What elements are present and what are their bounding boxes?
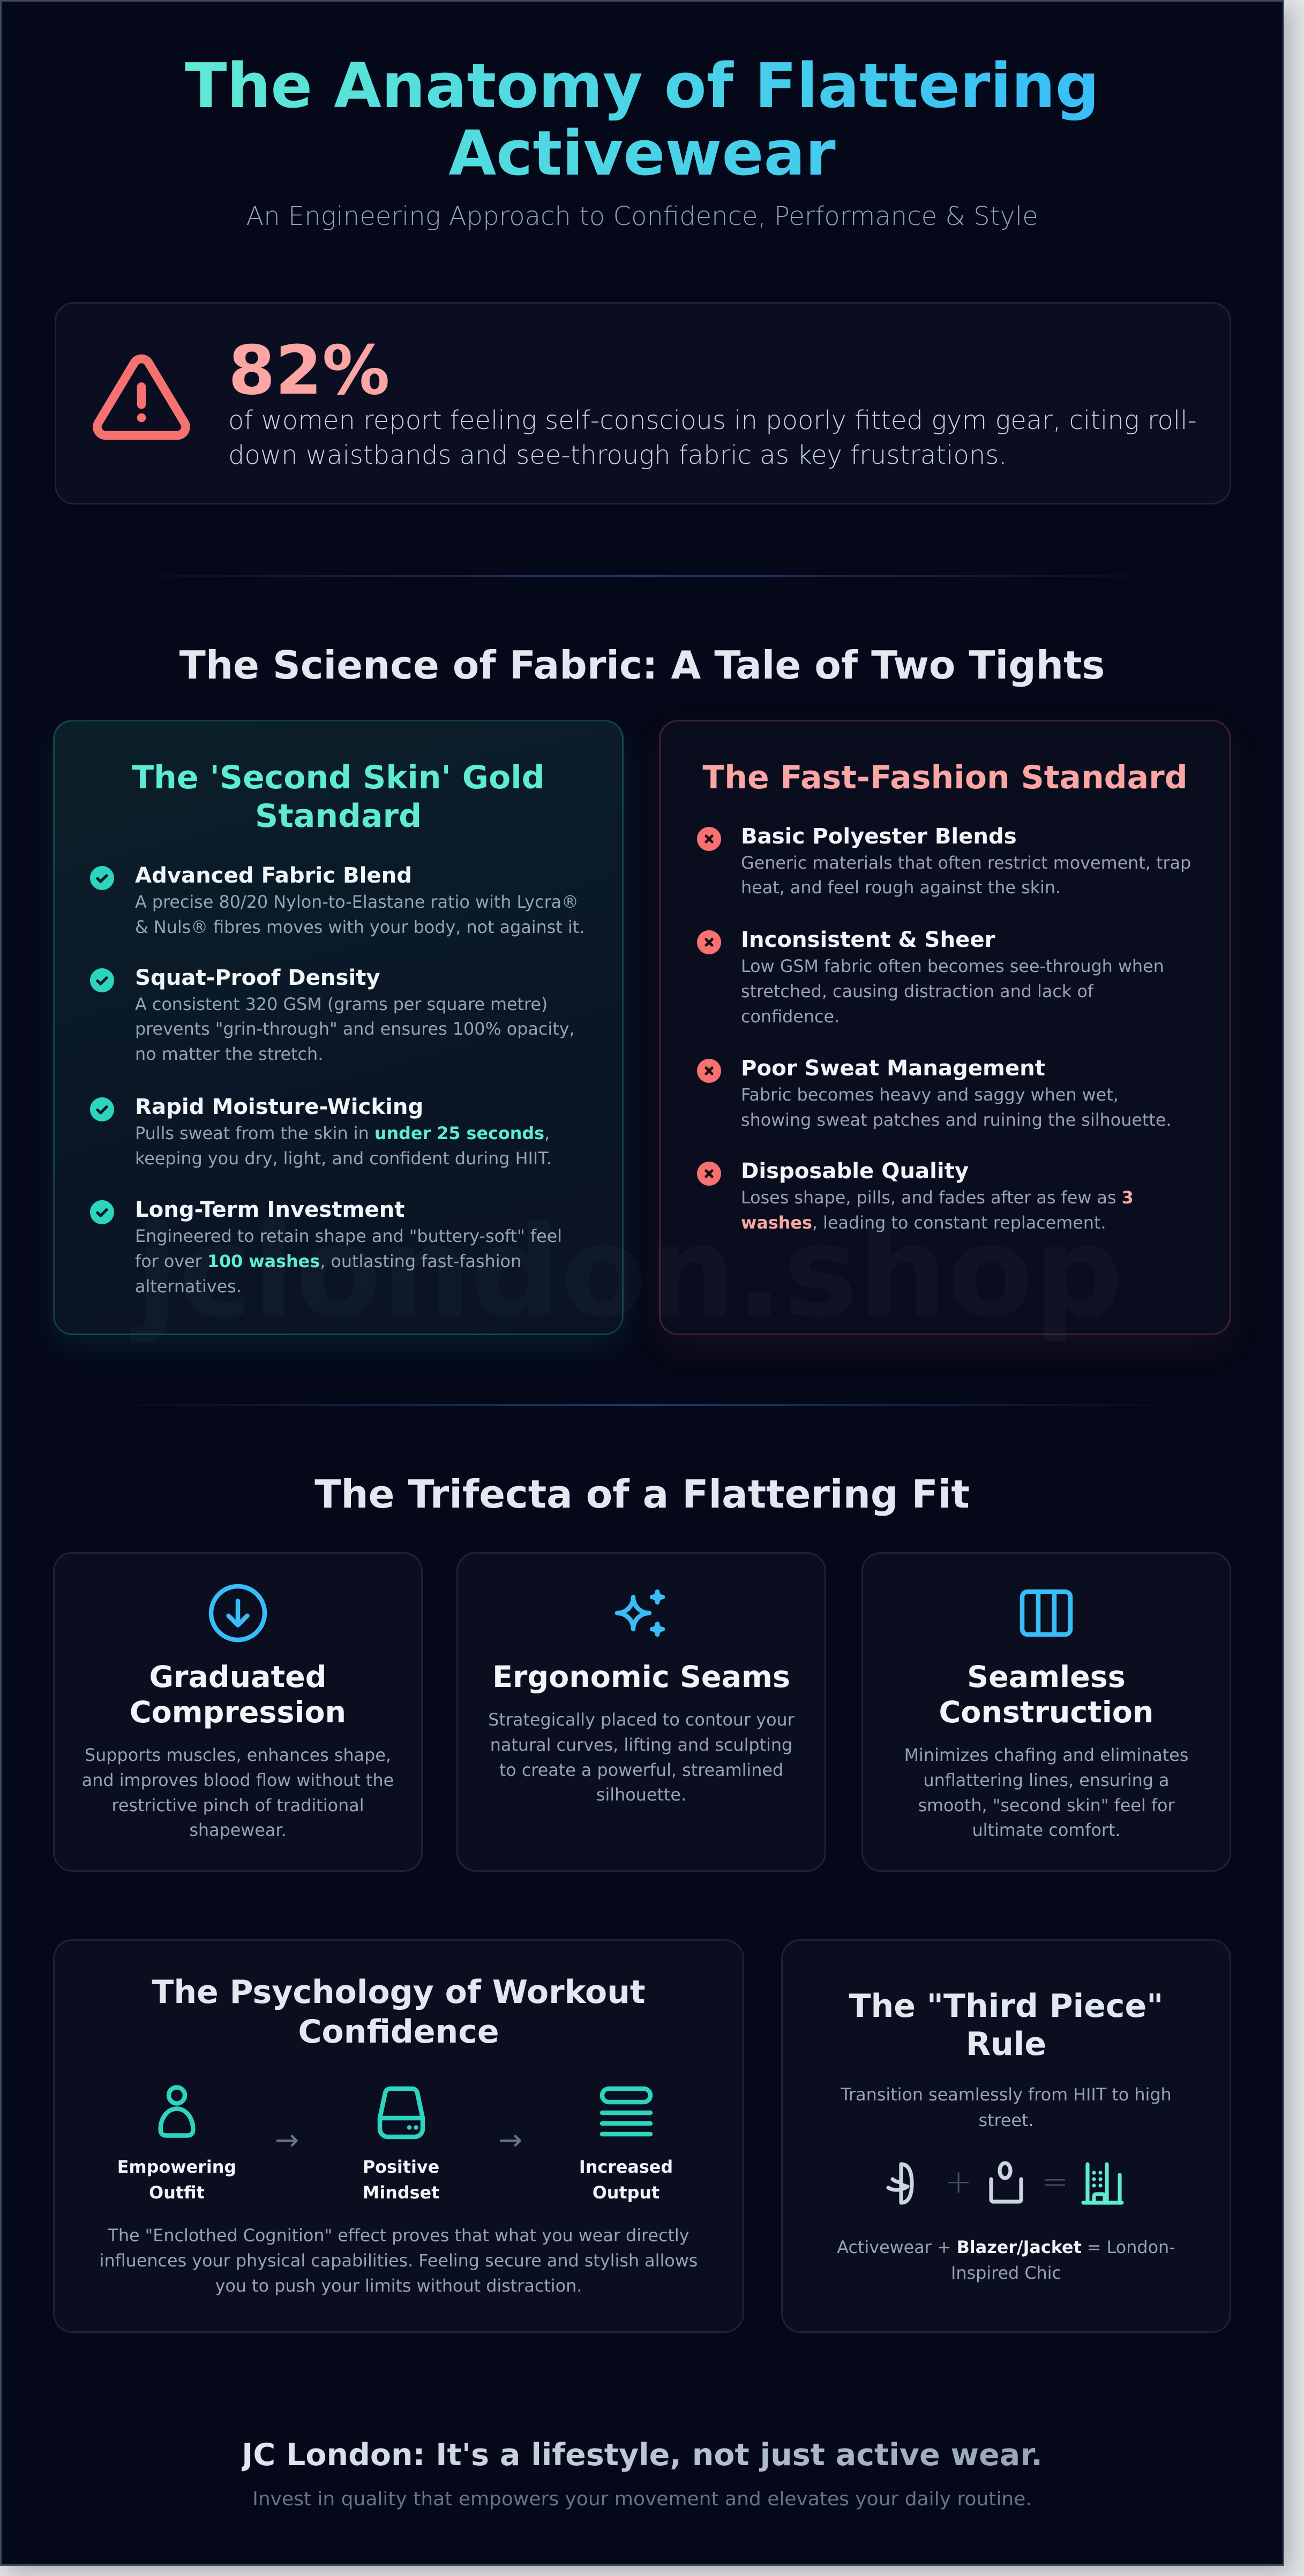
item: long-term investment: for over 100 washes, outlasting fast-fashion — [135, 1252, 521, 1271]
panel title: The "Third Piece" — [849, 1987, 1163, 2025]
watermark: jclondon.shop — [135, 1200, 1123, 1345]
card text — [904, 1745, 1188, 1840]
item: rapid moisture-wicking: Rapid Moisture-Wicking — [135, 1095, 423, 1119]
item: squat-proof density: A consistent 320 GSM (grams per square metre) — [135, 994, 548, 1014]
stat text: down waistbands and see-through fabric as key frustrations. — [228, 440, 1007, 470]
panel title: Rule — [966, 2025, 1046, 2063]
item: inconsistent & sheer: confidence. — [741, 1007, 840, 1027]
panel title: Confidence — [298, 2013, 499, 2050]
panel title: The 'Second Skin' Gold — [132, 759, 545, 796]
item: basic polyester: Generic materials that often restrict movement, trap — [741, 853, 1191, 873]
footer tagline: JC London: It's a lifestyle, not just active wear. — [242, 2437, 1043, 2473]
item: inconsistent & sheer: Inconsistent & Sheer — [741, 928, 995, 952]
card text: unflattering lines, ensuring a — [923, 1771, 1170, 1790]
description: you to push your limits without distraction. — [215, 2276, 582, 2296]
item: basic polyester — [741, 824, 1191, 898]
item: squat-proof density: no matter the stretch. — [135, 1044, 323, 1064]
caption — [783, 2235, 1230, 2286]
card text: silhouette. — [596, 1785, 686, 1805]
icon: x — [697, 827, 721, 851]
icon: x — [697, 930, 721, 954]
icon: x — [697, 1162, 721, 1186]
card title: Seamless — [967, 1660, 1126, 1694]
item: disposable quality: Disposable Quality — [741, 1159, 969, 1184]
label: positive mindset: Mindset — [363, 2183, 439, 2203]
title — [185, 50, 1099, 190]
icon: check — [90, 968, 114, 992]
card title: Construction — [939, 1695, 1153, 1730]
panel: third piece rule — [781, 1939, 1231, 2333]
card title: Compression — [130, 1695, 346, 1730]
icon: mindset — [369, 2081, 433, 2145]
card: graduated compression — [53, 1552, 423, 1872]
stat number: 82% — [228, 331, 390, 409]
subtitle: Transition seamlessly from HIIT to high — [841, 2085, 1172, 2105]
card title: Ergonomic Seams — [492, 1660, 790, 1694]
panel: fast fashion — [659, 720, 1231, 1335]
icon: blazer — [980, 2158, 1032, 2209]
item: basic polyester: heat, and feel rough against the skin. — [741, 878, 1061, 898]
card title — [130, 1660, 346, 1730]
item: disposable quality — [741, 1159, 1134, 1233]
card title: Graduated — [149, 1660, 326, 1694]
icon: sparkles — [615, 1590, 665, 1637]
heading: trifecta: The Trifecta of a Flattering Fit — [314, 1472, 970, 1517]
description: The "Enclothed Cognition" effect proves that what you wear directly — [108, 2226, 690, 2246]
panel: second skin gold standard — [53, 720, 624, 1335]
panel title: Standard — [255, 797, 422, 835]
stat text: of women report feeling self-conscious in poorly fitted gym gear, citing roll- — [228, 405, 1197, 435]
equals: = — [1041, 2163, 1068, 2201]
label: increased output: Output — [593, 2183, 660, 2203]
icon: check — [90, 1200, 114, 1224]
card text: shapewear. — [189, 1820, 287, 1840]
card text: and improves blood flow without the — [82, 1771, 394, 1790]
icon: x — [697, 1059, 721, 1083]
item: advanced fabric blend: & Nuls® fibres moves with your body, not against it. — [135, 917, 584, 937]
icon: check — [90, 1097, 114, 1121]
label: empowering outfit: Outfit — [149, 2183, 205, 2203]
label: empowering outfit — [104, 2155, 249, 2206]
item: disposable quality: Loses shape, pills, and fades after as few as 3 — [741, 1188, 1134, 1208]
plus: + — [945, 2163, 972, 2201]
icon: stack — [594, 2081, 658, 2145]
card text: to create a powerful, streamlined — [499, 1760, 783, 1780]
icon: activewear — [878, 2158, 929, 2209]
subtitle: An Engineering Approach to Confidence, Performance & Style — [246, 201, 1038, 231]
card: seamless construction — [861, 1552, 1231, 1872]
panel title: The Psychology of Workout — [152, 1974, 646, 2011]
card text: Supports muscles, enhances shape, — [85, 1745, 391, 1765]
panel title: The Fast-Fashion Standard — [702, 759, 1188, 796]
item: squat-proof density — [135, 965, 575, 1064]
item: basic polyester: Basic Polyester Blends — [741, 824, 1017, 848]
title: Activewear — [448, 118, 836, 190]
item: squat-proof density: Squat-Proof Density — [135, 965, 380, 990]
label: positive mindset — [329, 2155, 474, 2206]
caption: Inspired Chic — [951, 2263, 1061, 2283]
card text — [488, 1710, 795, 1805]
icon: warning triangle — [93, 355, 190, 440]
footer subtext: Invest in quality that empowers your movement and elevates your daily routine. — [252, 2488, 1032, 2510]
subtitle — [783, 2082, 1230, 2134]
label: increased output: Increased — [579, 2157, 673, 2177]
card text — [82, 1745, 394, 1840]
title: The Anatomy of Flattering — [185, 50, 1099, 122]
card text: Minimizes chafing and eliminates — [904, 1745, 1188, 1765]
arrow: → — [275, 2123, 299, 2157]
icon: circle arrow down — [209, 1584, 267, 1642]
arrow: → — [498, 2123, 522, 2157]
formula icons — [783, 2158, 1230, 2209]
item: long-term investment: Long-Term Investment — [135, 1197, 404, 1222]
stat callout — [55, 302, 1231, 504]
icon: columns — [1020, 1590, 1073, 1637]
item: rapid moisture-wicking: Pulls sweat from the skin in under 25 seconds, — [135, 1124, 550, 1143]
icon: check — [90, 866, 114, 890]
label: increased output — [554, 2155, 699, 2206]
subtitle: street. — [978, 2111, 1034, 2130]
icon: person — [158, 2085, 196, 2138]
item: poor sweat management: Poor Sweat Management — [741, 1056, 1045, 1081]
item: squat-proof density: prevents "grin-through" and ensures 100% opacity, — [135, 1019, 575, 1039]
panel title — [152, 1974, 646, 2050]
item: poor sweat management: showing sweat patches and ruining the silhouette. — [741, 1110, 1172, 1130]
item: rapid moisture-wicking: keeping you dry, light, and confident during HIIT. — [135, 1149, 552, 1169]
panel title — [783, 1987, 1230, 2063]
panel: psychology of workout confidence — [53, 1939, 744, 2333]
description: influences your physical capabilities. Feeling secure and stylish allows — [100, 2251, 698, 2271]
item: long-term investment: alternatives. — [135, 1277, 242, 1297]
item: inconsistent & sheer: stretched, causing distraction and lack of — [741, 982, 1093, 1001]
card: ergonomic seams — [456, 1552, 826, 1872]
stat text — [228, 405, 1197, 470]
icon: city building — [1077, 2158, 1128, 2209]
card text: natural curves, lifting and sculpting — [490, 1735, 792, 1755]
item: rapid moisture-wicking — [135, 1095, 552, 1169]
item: inconsistent & sheer: Low GSM fabric often becomes see-through when — [741, 956, 1164, 976]
item: advanced fabric blend: Advanced Fabric Blend — [135, 863, 412, 888]
item: advanced fabric blend — [135, 863, 584, 937]
card text: ultimate comfort. — [972, 1820, 1121, 1840]
card text: smooth, "second skin" feel for — [918, 1796, 1175, 1816]
item: poor sweat management: Fabric becomes heavy and saggy when wet, — [741, 1085, 1119, 1105]
panel title — [132, 759, 545, 835]
caption: Activewear + Blazer/Jacket = London- — [837, 2238, 1175, 2257]
item: poor sweat management — [741, 1056, 1172, 1130]
item: advanced fabric blend: A precise 80/20 Nylon-to-Elastane ratio with Lycra® — [135, 892, 579, 912]
description — [55, 2224, 743, 2299]
card text: Strategically placed to contour your — [488, 1710, 795, 1730]
item: long-term investment: Engineered to retain shape and "buttery-soft" feel — [135, 1226, 562, 1246]
label: positive mindset: Positive — [363, 2157, 439, 2177]
card text: restrictive pinch of traditional — [111, 1796, 364, 1816]
item: long-term investment — [135, 1197, 562, 1297]
item: inconsistent & sheer — [741, 928, 1164, 1027]
heading: science of fabric: The Science of Fabric: A Tale of Two Tights — [179, 643, 1105, 688]
label: empowering outfit: Empowering — [117, 2157, 236, 2177]
card title — [939, 1660, 1153, 1730]
item: disposable quality: washes, leading to constant replacement. — [741, 1213, 1106, 1233]
